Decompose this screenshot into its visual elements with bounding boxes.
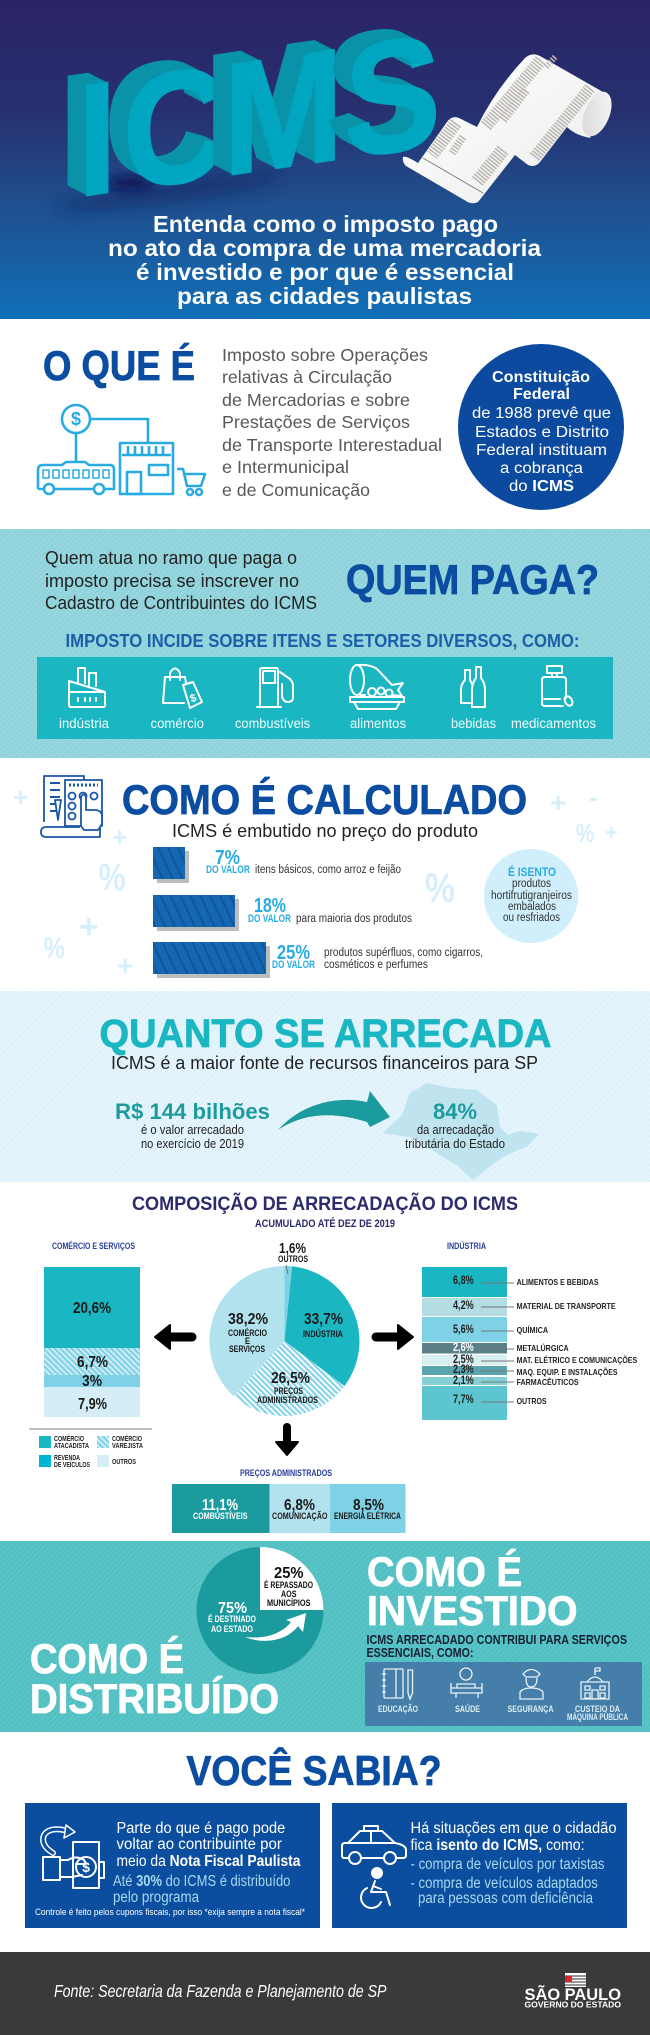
chart: pie [209,1240,359,1416]
arrow: curved [278,1091,390,1130]
decorative symbols: - [589,782,598,812]
decorative symbols: + [117,950,133,981]
icon: medicamentos [542,666,574,707]
chart: distribution pie: É REPASSADO [264,1580,313,1591]
decorative symbols: + [112,822,127,852]
labels: sectors: medicamentos [511,716,596,731]
chart: indústria stack: MAQ. EQUIP. E INSTALAÇÕES [517,1367,618,1377]
heading: composição: COMPOSIÇÃO DE ARRECADAÇÃO DO ICMS [132,1192,518,1215]
stat: 84%: da arrecadação [417,1123,494,1137]
text: definition: Prestações de Serviços [222,412,410,432]
title: ICMS 3D letters: M [223,13,344,210]
legend: REVENDA [54,1455,80,1462]
panel: você sabia [25,1746,627,1928]
callout: constituição federal [458,344,624,510]
text: definition: de Mercadorias e sobre [222,390,410,410]
subtitle: é investido e por que é essencial [136,259,514,285]
legend: VAREJISTA [112,1443,143,1450]
text: definition: e Intermunicipal [222,457,349,477]
icon: alimentos [350,665,404,709]
icon: saúde [451,1668,482,1698]
callout: é isento [484,849,578,943]
icon: calculator and hand [41,776,102,837]
labels: sectors: combustíveis [235,716,310,731]
chart: indústria stack: 7,7% [453,1394,474,1406]
chart: indústria stack: QUÍMICA [517,1325,548,1335]
bar: 25%: 25% [277,942,310,964]
bar: 18%: para maioria dos produtos [296,913,412,925]
text: definition: relativas à Circulação [222,367,392,387]
chart: preços administrados: 11,1% [202,1497,238,1514]
chart: distribution pie: É DESTINADO [208,1614,256,1625]
panel: isenção: - compra de veículos adaptados [410,1875,598,1892]
text: definition [222,345,442,500]
subheading: acumulado: ACUMULADO ATÉ DEZ DE 2019 [255,1217,395,1230]
chart: preços administrados: ENERGIA ELÉTRICA [334,1511,401,1522]
arrow: right [376,1325,413,1349]
subtitle: para as cidades paulistas [177,283,472,309]
labels: services [378,1703,628,1722]
chart: pie: 38,2% [228,1311,268,1328]
callout: é isento: hortifrutigranjeiros [491,890,572,902]
text: serviços essenciais: ESSENCIAIS, COMO: [366,1645,474,1660]
heading: como é investido: COMO É [367,1548,522,1595]
text: nota fiscal: meio da Nota Fiscal Paulista [116,1853,301,1870]
text: nota fiscal: voltar ao contribuinte por [116,1836,282,1853]
chart: distribution pie: 25% [274,1565,304,1582]
labels: services: MÁQUINA PÚBLICA [567,1711,628,1722]
chart: indústria stack: 4,2% [453,1300,474,1312]
panel: isenção: para pessoas com deficiência [418,1890,593,1907]
heading: como é calculado: COMO É CALCULADO [122,776,527,823]
bar: 18%: DO VALOR [248,913,291,925]
labels: sectors: alimentos [350,716,406,731]
panel: essential services [365,1662,642,1726]
chart: distribution pie: AO ESTADO [211,1624,253,1635]
decorative symbols: + [605,820,618,845]
decorative symbols: + [550,787,566,818]
callout: constituição federal: Federal instituam [476,442,607,459]
subtitle: Entenda como o imposto pago [153,211,498,237]
panel: sectors [37,657,613,739]
chart: indústria stack: 2,6% [453,1342,474,1354]
legend: ATACADISTA [54,1443,89,1450]
stat: 84% [405,1099,505,1151]
chart: pie: 26,5% [271,1370,310,1387]
labels: sectors: indústria [59,716,109,731]
panel: como é distribuído e investido [0,1541,650,1732]
chart: comércio e serviços stack: 6,7% [77,1354,108,1371]
text: nota fiscal [116,1820,301,1870]
bar: 18% [153,895,412,931]
legend: DE VEÍCULOS [54,1460,90,1469]
panel: nota fiscal paulista: pelo programa [113,1889,199,1906]
chart: pie: ADMINISTRADOS [257,1395,318,1406]
subheading: imposto incide: IMPOSTO INCIDE SOBRE ITENS E SETORES DIVERSOS, COMO: [66,631,580,651]
labels: sectors: comércio [150,716,204,731]
title: ICMS 3D letters: I [77,46,117,231]
subtitle [108,211,541,309]
bar: 25%: DO VALOR [272,959,315,971]
decorative symbols: % [576,819,594,848]
chart: preços administrados: COMUNICAÇÃO [272,1511,328,1522]
heading: o que é: O QUE É [43,342,195,389]
callout: constituição federal: do ICMS [509,478,574,495]
text: serviços essenciais [366,1632,627,1660]
arrow: down [276,1427,298,1455]
heading: como é distribuído [30,1635,279,1722]
text: embutido: ICMS é embutido no preço do produto [172,820,478,841]
labels: services: SAÚDE [455,1703,480,1714]
labels: services: SEGURANÇA [508,1704,554,1714]
title: ICMS 3D letters: S [344,0,441,192]
decorative symbols: % [425,866,455,912]
chart: pie: SERVIÇOS [229,1344,265,1355]
icon: wheelchair [361,1868,390,1908]
illustration: receipt roll [403,54,617,203]
icon: taxi [342,1826,406,1864]
legend: OUTROS [112,1459,136,1466]
chart: distribution pie: AOS [281,1589,296,1600]
panel: isenção: - compra de veículos por taxistas [410,1856,605,1873]
stat: 84%: tributária do Estado [405,1137,505,1151]
stat: R$ 144 bilhões: é o valor arrecadado [141,1123,244,1137]
heading: como é distribuído: DISTRIBUÍDO [30,1675,279,1722]
chart: preços administrados: 8,5% [353,1497,384,1514]
panel: nota fiscal paulista [25,1803,320,1928]
chart: distribution pie: MUNICÍPIOS [267,1598,310,1609]
bar: 25% [153,942,483,978]
chart: preços administrados [172,1468,406,1533]
labels: services: CUSTEIO DA [575,1704,620,1714]
text: nota fiscal: Parte do que é pago pode [116,1820,285,1837]
panel: como é calculado [13,775,618,981]
panel: quanto se arrecada [0,991,650,1182]
heading: como é investido: INVESTIDO [367,1587,578,1634]
stat: R$ 144 bilhões [115,1099,270,1151]
bar: 7% [153,847,401,883]
labels: sectors [59,716,596,731]
bar: 25%: produtos supérfluos, como cigarros, [324,947,483,959]
text: definition: e de Comunicação [222,480,370,500]
chart: indústria stack: 2,5% [453,1354,474,1366]
chart: indústria stack: FARMACÊUTICOS [517,1376,579,1387]
legend: COMÉRCIO [54,1434,84,1443]
icon: combustíveis [257,668,293,707]
callout: é isento: É ISENTO [508,864,556,879]
chart: distribution pie [196,1547,324,1674]
labels: services: EDUCAÇÃO [378,1704,418,1714]
icon: segurança [520,1670,543,1699]
chart: comércio e serviços stack [44,1241,140,1417]
callout: é isento: ou resfriados [503,912,560,924]
chart: indústria stack: 6,8% [453,1275,474,1287]
decorative symbols: % [44,930,65,965]
callout: constituição federal: de 1988 prevê que [472,405,611,422]
chart: pie: 33,7% [304,1311,343,1328]
chart: indústria stack [422,1240,637,1420]
text: quem atua: Quem atua no ramo que paga o [45,548,297,568]
title: ICMS 3D letters [68,0,441,231]
heading: você sabia: VOCÊ SABIA? [186,1746,442,1794]
chart: indústria stack: METALÚRGICA [517,1342,569,1353]
icon: comércio [163,668,202,708]
panel: isenção [332,1803,627,1928]
subtitle: no ato da compra de uma mercadoria [108,235,541,261]
callout: é isento: produtos [512,878,551,890]
heading: como é investido [367,1548,578,1634]
chart: comércio e serviços stack: COMÉRCIO E SERVIÇOS [52,1241,135,1252]
panel: composição de arrecadação [29,1192,637,1533]
stat: 84%: 84% [433,1099,477,1124]
heading: como é distribuído: COMO É [30,1635,184,1682]
chart: pie: COMÉRCIO [228,1328,267,1339]
text: isenção: Há situações em que o cidadão [410,1820,616,1837]
labels: sectors: bebidas [451,716,496,731]
title: ICMS 3D letters: C [122,30,228,224]
map: São Paulo state [383,1083,539,1180]
logo: São Paulo: GOVERNO DO ESTADO [524,2000,621,2010]
decorative symbols [13,782,618,981]
header receipt and subtitle [108,54,612,309]
callout: constituição federal: Estados e Distrito [475,424,609,441]
icon: educação [382,1669,412,1699]
stat: R$ 144 bilhões: R$ 144 bilhões [115,1099,270,1124]
chart: indústria stack: 2,1% [453,1375,474,1387]
chart: distribution pie: 75% [218,1600,247,1617]
panel: nota fiscal paulista: Controle é feito pelos cupons fiscais, por isso *exija sempre a nota fiscal* [35,1907,305,1918]
icon: bus, store and cart: $ [71,409,81,429]
chart: indústria stack: OUTROS [517,1396,547,1406]
chart: comércio e serviços stack: 20,6% [73,1300,111,1317]
logo: São Paulo [524,1973,621,2010]
callout: constituição federal: Constituição [492,369,590,386]
decorative symbols: % [99,857,126,899]
chart: preços administrados: 6,8% [284,1497,315,1514]
footer [0,1952,650,2035]
text: quem atua: Cadastro de Contribuintes do ICMS [45,593,317,613]
icon: custeio da máquina pública [581,1668,609,1699]
chart: indústria stack: 5,6% [453,1324,474,1336]
panel: quem paga [0,529,650,758]
header background [0,0,650,319]
chart: pie: INDÚSTRIA [303,1328,343,1340]
callout: constituição federal: Federal [513,386,570,403]
callout: constituição federal: a cobrança [500,460,583,477]
text: isenção [410,1820,616,1854]
chart: comércio e serviços stack: 3% [82,1373,102,1390]
chart: pie: 1,6% [279,1240,306,1257]
chart: indústria stack: ALIMENTOS E BEBIDAS [517,1277,599,1287]
panel: nota fiscal paulista: Até 30% do ICMS é distribuído [113,1873,290,1890]
text: isenção: fica isento do ICMS, como: [410,1837,584,1854]
legend [29,1429,152,1469]
icon: bus, store and cart [38,405,205,495]
heading: quanto se arrecada: QUANTO SE ARRECADA [100,1012,552,1056]
chart: comércio e serviços stack: 7,9% [78,1396,107,1413]
text: maior fonte: ICMS é a maior fonte de recursos financeiros para SP [111,1053,538,1073]
callout: é isento: embalados [508,901,556,913]
legend: COMÉRCIO [112,1434,142,1443]
icon: money and hand [43,1825,104,1888]
icon: bebidas [461,667,485,707]
chart: pie: OUTROS [278,1254,308,1264]
chart: indústria stack: 2,3% [453,1364,474,1376]
text: quem atua: imposto precisa se inscrever no [45,571,299,591]
bar: 25%: cosméticos e perfumes [324,959,428,971]
text: definition: de Transporte Interestadual [222,435,442,455]
text: fonte: Fonte: Secretaria da Fazenda e Planejamento de SP [54,1981,387,2001]
chart: pie: PREÇOS [274,1386,303,1397]
bar: 7%: 7% [215,847,240,869]
decorative symbols: + [13,782,28,812]
chart: pie: E [245,1336,250,1347]
chart: preços administrados: PREÇOS ADMINISTRADOS [240,1468,332,1479]
bar: 7%: DO VALOR [206,864,250,876]
icon: indústria [69,668,105,707]
icon: money and hand: $ [82,1859,90,1875]
chart: preços administrados: COMBUSTÍVEIS [193,1511,248,1522]
bar: 18%: 18% [254,895,286,917]
heading: quem paga: QUEM PAGA? [346,556,599,603]
logo: São Paulo: SÃO PAULO [524,1984,621,2004]
chart: indústria stack: MATERIAL DE TRANSPORTE [517,1301,616,1311]
icon: comércio: $ [188,692,198,705]
decorative symbols: + [79,908,99,946]
chart: indústria stack: INDÚSTRIA [447,1240,486,1252]
arrow: left [155,1325,192,1349]
bar: 7%: itens básicos, como arroz e feijão [255,864,401,876]
text: definition: Imposto sobre Operações [222,345,428,365]
stat: R$ 144 bilhões: no exercício de 2019 [141,1137,244,1151]
text: quem atua [45,548,317,613]
panel: o que é [36,342,624,510]
